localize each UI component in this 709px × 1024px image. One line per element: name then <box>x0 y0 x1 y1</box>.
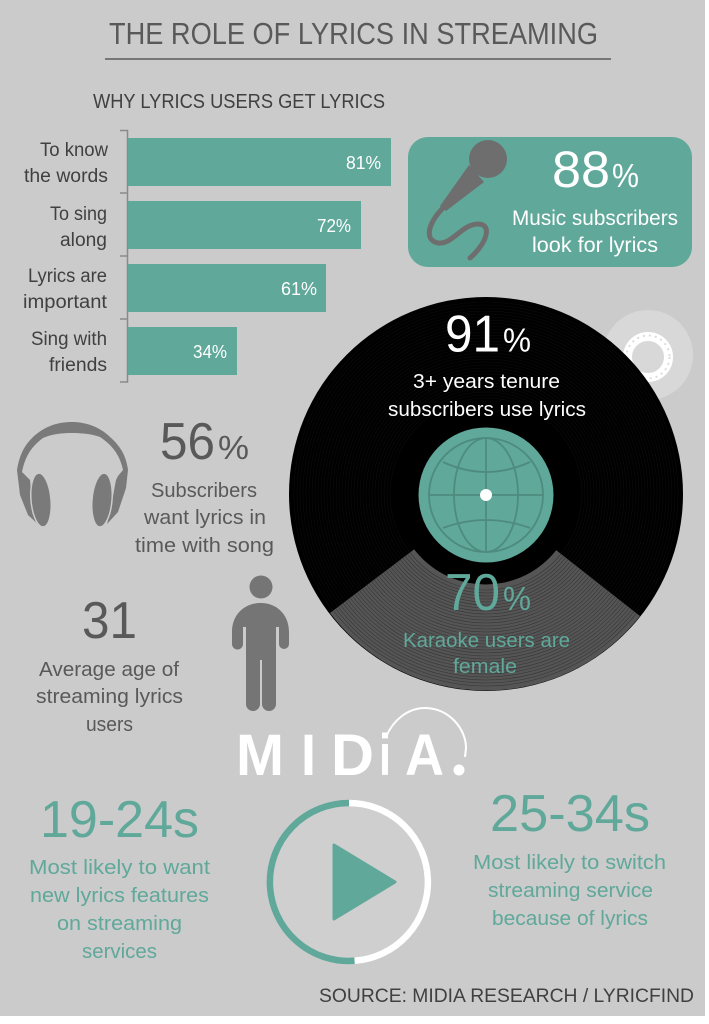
logo: MIDiA: D <box>331 723 374 788</box>
source note: SOURCE: MIDIA RESEARCH / LYRICFIND <box>319 986 694 1007</box>
logo: MIDiA: A <box>405 723 444 788</box>
text: subscribers want lyrics in time with song <box>135 479 274 557</box>
bar: to sing along: 72% <box>317 216 351 236</box>
bar: lyrics are important: 61% <box>281 279 317 299</box>
bar: lyrics are important <box>23 264 326 313</box>
record label ring <box>396 404 576 584</box>
text: subscribers want lyrics in time with song: time with song <box>135 534 274 557</box>
icon: microphone <box>429 140 507 258</box>
icon: person <box>232 576 289 711</box>
statistic: 70%: 70 <box>445 564 500 622</box>
text: most likely to switch streaming service: because of lyrics <box>492 907 648 930</box>
statistic: 25-34s: 25-34s <box>490 785 650 843</box>
text: music subscribers look for lyrics: look for lyrics <box>532 233 658 257</box>
bar chart: reasons for using lyrics <box>23 130 391 382</box>
logo: MIDiA: i <box>379 723 391 788</box>
text: subscribers want lyrics in time with song: Subscribers <box>151 479 257 502</box>
text: music subscribers look for lyrics: Music subscribers <box>512 206 678 230</box>
text: karaoke users are female: Karaoke users are <box>403 629 570 652</box>
text: average age of streaming lyrics users: streaming lyrics <box>36 685 183 708</box>
logo: MIDiA: I <box>301 723 316 788</box>
statistic: 91%: 91 <box>445 306 500 364</box>
logo: MIDiA: M <box>236 723 284 788</box>
statistic: 56%: % <box>218 429 249 466</box>
text: most likely to switch streaming service <box>473 851 666 930</box>
text: 3+ years tenure subscribers use lyrics <box>388 370 586 421</box>
statistic: 91%: % <box>503 322 531 358</box>
text: most likely to want new lyrics features: Most likely to want <box>29 856 210 879</box>
statistic: 70% <box>445 564 531 622</box>
text: average age of streaming lyrics users: Average age of <box>39 658 179 681</box>
text: karaoke users are female <box>403 629 570 678</box>
bar: to know the words: To know <box>40 140 108 161</box>
text: most likely to want new lyrics features <box>29 856 210 963</box>
logo: MIDiA <box>236 708 466 788</box>
statistic: 88% <box>552 141 639 198</box>
bar: to sing along <box>50 201 361 251</box>
text: most likely to switch streaming service: Most likely to switch <box>473 851 666 874</box>
text: average age of streaming lyrics users: users <box>86 713 133 736</box>
statistic: 31: 31 <box>82 592 137 650</box>
title: THE ROLE OF LYRICS IN STREAMING <box>109 16 598 51</box>
bar: lyrics are important: Lyrics are <box>28 266 107 287</box>
text: average age of streaming lyrics users <box>36 658 183 736</box>
bar: sing with friends <box>31 327 237 376</box>
heading: why lyrics users get lyrics: WHY LYRICS USERS GET LYRICS <box>93 90 385 113</box>
record grooves <box>294 302 678 686</box>
text: most likely to switch streaming service: streaming service <box>488 879 653 902</box>
text: most likely to want new lyrics features: new lyrics features <box>30 884 209 907</box>
text: music subscribers look for lyrics <box>512 206 678 257</box>
bar: sing with friends: Sing with <box>31 329 107 350</box>
bar: to know the words <box>24 138 391 187</box>
statistic: 88%: % <box>612 157 639 194</box>
karaoke wedge <box>330 495 640 691</box>
text: 3+ years tenure subscribers use lyrics: subscribers use lyrics <box>388 398 586 421</box>
statistic: 19-24s: 19-24s <box>40 791 199 849</box>
bar: to sing along: To sing <box>50 204 107 225</box>
bar chart axis <box>120 130 128 382</box>
icon: play button <box>270 803 428 961</box>
bar: lyrics are important: important <box>23 292 108 313</box>
icon: small faded disc <box>603 310 693 400</box>
vinyl record panel <box>289 297 683 691</box>
text: 3+ years tenure subscribers use lyrics: 3+ years tenure <box>413 370 560 393</box>
bar: sing with friends: 34% <box>193 342 227 362</box>
statistic: 91% <box>445 306 531 364</box>
text: most likely to want new lyrics features: services <box>82 940 157 963</box>
bar: to know the words: 81% <box>346 153 381 173</box>
icon: headphones <box>17 422 128 528</box>
text: subscribers want lyrics in time with song: want lyrics in <box>143 506 266 529</box>
text: most likely to want new lyrics features: on streaming <box>57 912 182 935</box>
text: karaoke users are female: female <box>453 655 517 678</box>
statistic: 56%: 56 <box>160 413 215 471</box>
statistic: 70%: % <box>503 580 531 617</box>
icon: globe label <box>418 428 554 562</box>
bar: sing with friends: friends <box>49 355 107 376</box>
statistic: 56% <box>160 413 249 471</box>
bar: to sing along: along <box>60 230 107 251</box>
bar: to know the words: the words <box>24 166 108 187</box>
panel: 88% music subscribers <box>408 137 692 267</box>
statistic: 88%: 88 <box>552 141 610 198</box>
